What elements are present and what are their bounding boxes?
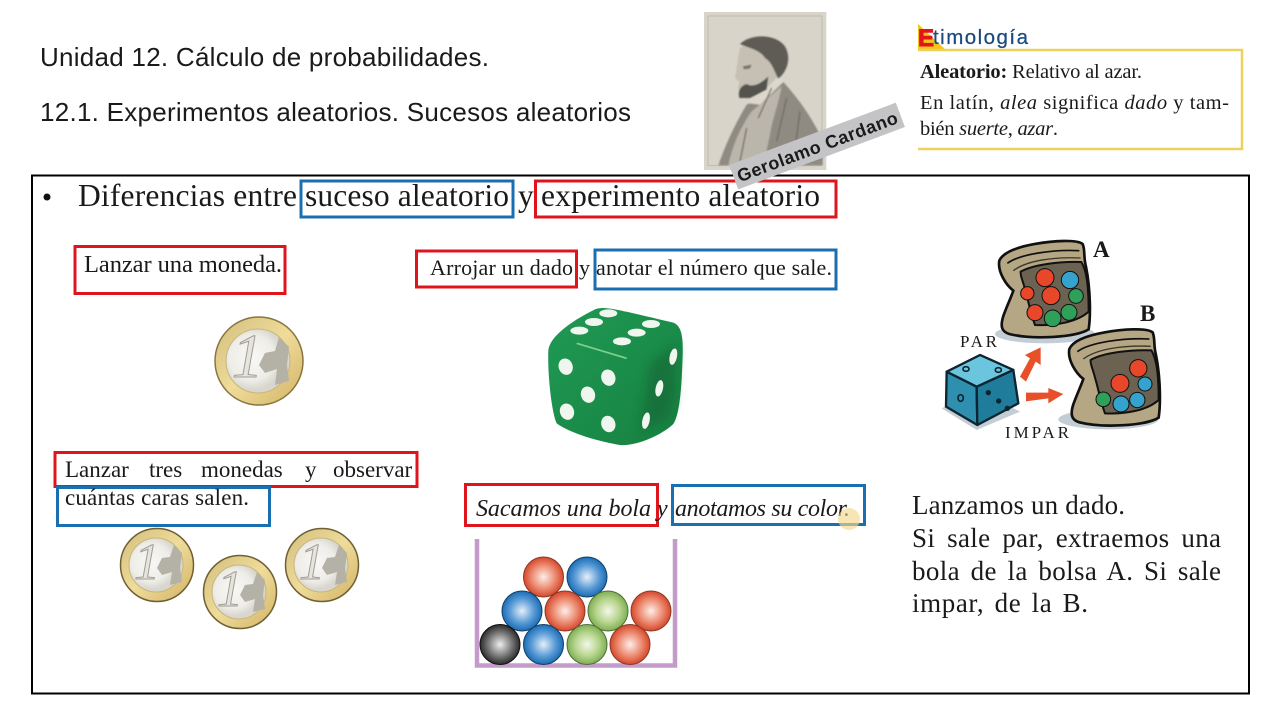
title: unidad: Unidad 12. Cálculo de probabilidades. <box>40 42 489 72</box>
example: sacamos una bola <box>466 484 864 526</box>
text block: lanzamos un dado: impar, de la B. <box>912 588 1088 618</box>
example: lanzar tres monedas: y <box>305 457 317 482</box>
example: lanzar tres monedas <box>55 452 417 526</box>
illustration: container with balls <box>477 539 675 666</box>
highlight box: suceso aleatorio: suceso aleatorio <box>305 178 509 213</box>
label: B: B <box>1140 301 1155 326</box>
arrow: impar <box>1026 388 1063 403</box>
example: lanzar tres monedas: Lanzar <box>65 457 129 482</box>
text block: lanzamos un dado: Si sale par, extraemos una <box>912 523 1221 553</box>
cursor highlight <box>838 508 860 530</box>
text block: lanzamos un dado: Lanzamos un dado. <box>912 490 1125 520</box>
subtitle: section: 12.1. Experimentos aleatorios. Sucesos aleatorios <box>40 97 631 127</box>
example: lanzar tres monedas: monedas <box>201 457 283 482</box>
highlight box: experimento aleatorio: experimento aleatorio <box>541 178 820 213</box>
icon: blue die <box>942 355 1020 430</box>
bag A <box>995 241 1095 343</box>
definition text: Aleatorio: Relativo al azar. <box>920 61 1142 83</box>
example: sacamos una bola: Sacamos una bola <box>476 496 651 522</box>
text block: lanzamos un dado: bola de la bolsa A. Si sale <box>912 556 1221 586</box>
portrait: Gerolamo Cardano <box>704 12 826 170</box>
label: Gerolamo Cardano: Gerolamo Cardano <box>734 108 900 186</box>
heading tab: etimología: E <box>918 25 934 52</box>
heading tab: etimología: timología <box>933 26 1029 49</box>
example: arrojar un dado <box>416 250 836 289</box>
icon: three euro coins <box>120 528 358 628</box>
heading: diferencias: y <box>518 178 534 213</box>
definition text: bién suerte, azar. <box>920 118 1058 140</box>
icon: euro coin: 1 <box>232 323 263 391</box>
text block: lanzamos un dado <box>912 490 1221 618</box>
main frame <box>32 176 1249 694</box>
label: A: A <box>1093 237 1110 262</box>
heading: diferencias <box>44 178 836 217</box>
example: lanzar tres monedas: tres <box>149 457 182 482</box>
panel: etimología <box>918 24 1242 149</box>
example: sacamos una bola: anotamos su color. <box>675 496 850 522</box>
label: IMPAR: IMPAR <box>1005 423 1070 442</box>
icon: green die <box>548 308 683 445</box>
example: arrojar un dado: anotar el número que sale. <box>596 255 832 280</box>
icon: three euro coins: 1 <box>217 561 243 618</box>
example: arrojar un dado: y <box>579 255 590 280</box>
icon: three euro coins: 1 <box>134 534 160 591</box>
label: PAR: PAR <box>960 332 998 351</box>
definition text <box>920 61 1229 140</box>
example: lanzar tres monedas: observar <box>333 457 413 482</box>
icon: euro coin <box>215 317 303 405</box>
heading: diferencias: Diferencias entre <box>78 178 297 213</box>
example: arrojar un dado: Arrojar un dado <box>430 255 573 280</box>
arrow: par <box>1020 347 1041 382</box>
example: lanzar tres monedas: cuántas caras salen. <box>65 485 249 510</box>
bag B <box>1058 329 1160 429</box>
definition text: En latín, alea significa dado y tam- <box>920 92 1229 114</box>
example: lanzar una moneda <box>75 246 285 294</box>
example: sacamos una bola: y <box>655 496 668 522</box>
icon: three euro coins: 1 <box>299 534 325 591</box>
example: lanzar una moneda: Lanzar una moneda. <box>84 251 282 278</box>
illustration: bags A and B with die <box>942 241 1160 430</box>
